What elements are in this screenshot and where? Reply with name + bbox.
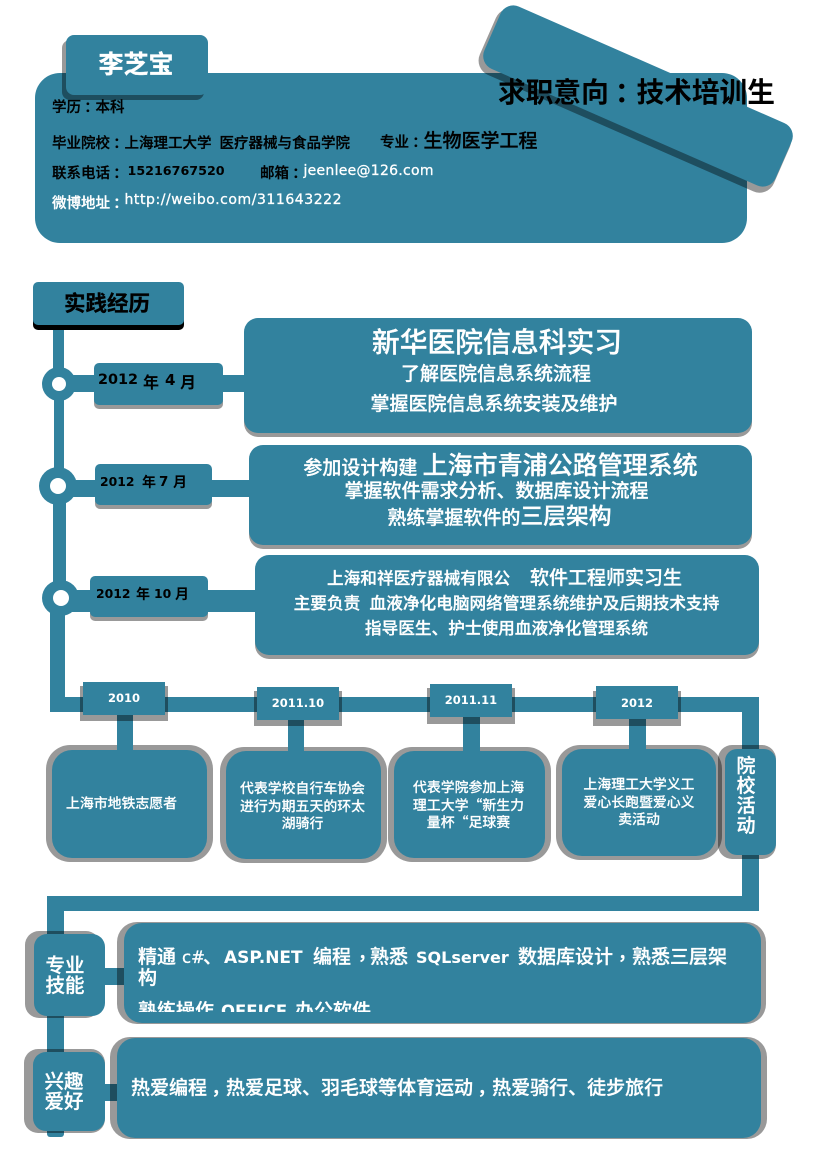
timeline node 3	[42, 580, 79, 616]
skills text: c#	[182, 948, 205, 967]
skills text: ASP.NET	[224, 948, 303, 968]
school: 毕业院校：上海理工大学 医疗器械与食品学院	[52, 132, 350, 153]
date text: 年	[143, 373, 159, 392]
card text: 上海理工大学义工	[583, 776, 695, 792]
label text: 专业	[45, 955, 84, 977]
label text: 动	[736, 816, 756, 837]
skills text: 数据库设计	[518, 947, 613, 968]
weibo: 微博地址：http://weibo.com/311643222	[52, 192, 342, 213]
timeline node 1	[42, 367, 76, 401]
panel: professional skills	[117, 922, 766, 1024]
card text: 进行为期五天的环太	[240, 798, 365, 814]
skills text	[138, 944, 727, 1012]
company title: 软件工程师实习生	[530, 568, 682, 589]
year tag: 2012	[593, 686, 681, 726]
card text	[583, 776, 695, 827]
label text: 活	[736, 796, 756, 817]
label text: 爱好	[44, 1091, 84, 1113]
year text: 2011.10	[272, 696, 324, 710]
panel: hobbies	[110, 1037, 767, 1139]
card text: 代表学院参加上海	[413, 779, 524, 795]
job objective: 求职意向：技术培训生	[498, 70, 775, 110]
skills text: 编程	[313, 947, 351, 968]
name tab	[66, 35, 208, 95]
card text: 量杯“足球赛	[427, 812, 510, 832]
year tag: 2010	[80, 682, 168, 721]
skills text: SQLserver	[416, 948, 509, 967]
project detail 2: 熟练掌握软件的三层架构	[387, 503, 612, 529]
skills text: ，	[353, 944, 372, 971]
timeline node 2	[39, 467, 77, 505]
internship detail 1: 了解医院信息系统流程	[401, 364, 591, 385]
card text: 代表学校自行车协会	[240, 780, 365, 796]
label text	[736, 756, 756, 837]
label text: 校	[736, 776, 756, 797]
year tag: 2011.10	[254, 687, 342, 726]
date text: 10	[154, 586, 171, 601]
company title	[327, 568, 682, 589]
phone: 联系电话：15216767520	[52, 162, 225, 183]
hobbies text: 热爱编程，热爱足球、羽毛球等体育运动，热爱骑行、徒步旅行	[131, 1073, 663, 1100]
card text: 上海市地铁志愿者	[66, 795, 177, 811]
card text	[240, 780, 365, 831]
card text: 卖活动	[618, 811, 660, 827]
date text: 2012	[98, 372, 138, 388]
year text: 2011.11	[445, 693, 497, 707]
panel: medical device company	[255, 555, 759, 655]
date text	[96, 586, 189, 603]
card text: 湖骑行	[282, 815, 323, 831]
education: 学历：本科	[52, 96, 124, 117]
date text: 2012	[96, 586, 130, 601]
label: campus activities	[718, 745, 776, 859]
card text: 爱心长跑暨爱心义	[583, 794, 695, 810]
name: 李芝宝	[98, 51, 174, 79]
skills text: 精通	[138, 947, 176, 968]
label text	[45, 955, 84, 997]
label: hobbies	[24, 1049, 105, 1133]
panel: personal info	[35, 73, 747, 243]
date text: 2012	[100, 474, 134, 489]
skills text: ，	[613, 944, 632, 971]
project title: 参加设计构建 上海市青浦公路管理系统	[303, 452, 698, 480]
year text: 2010	[108, 691, 140, 705]
date: 2012 October	[90, 576, 208, 617]
year text: 2012	[621, 696, 653, 710]
card: metro volunteer	[46, 745, 213, 862]
date: 2012 July	[95, 464, 212, 505]
label: skills	[25, 931, 105, 1018]
date text	[98, 371, 196, 392]
date text: 月	[173, 475, 187, 491]
heading: practice experience	[33, 282, 184, 325]
skills text: 构	[138, 968, 157, 989]
date text: 月	[175, 587, 189, 603]
card text: 理工大学“新生力	[413, 794, 524, 814]
date text: 4	[165, 371, 175, 389]
year tag: 2011.11	[427, 684, 515, 724]
card text	[413, 779, 524, 832]
date text: 年	[142, 475, 156, 491]
project detail 1: 掌握软件需求分析、数据库设计流程	[344, 481, 648, 502]
skills text: 熟悉三层架	[632, 947, 727, 968]
date text: 7	[159, 474, 168, 490]
company title: 上海和祥医疗器械有限公	[327, 569, 510, 588]
company detail 1: 主要负责 血液净化电脑网络管理系统维护及后期技术支持	[294, 594, 719, 613]
internship title: 新华医院信息科实习	[372, 327, 622, 358]
label text: 院	[736, 756, 756, 777]
date: 2012 April	[94, 363, 223, 405]
panel: hospital internship	[244, 318, 752, 433]
label text: 兴趣	[44, 1071, 84, 1093]
date text	[100, 474, 187, 491]
company detail 2: 指导医生、护士使用血液净化管理系统	[365, 619, 648, 638]
card: football	[388, 747, 551, 862]
heading text: 实践经历	[64, 292, 150, 316]
stem lines to cards	[117, 715, 646, 751]
internship detail 2: 掌握医院信息系统安装及维护	[370, 394, 618, 415]
banner: job objective background	[479, 1, 797, 191]
skills text: 、	[203, 947, 222, 968]
date text: 年	[136, 587, 150, 603]
major: 专业：生物医学工程	[380, 131, 538, 152]
skills text: 熟悉	[370, 947, 408, 968]
label text	[44, 1071, 84, 1113]
email: 邮箱：jeenlee@126.com	[260, 162, 434, 183]
card: charity run	[556, 745, 722, 860]
panel: road management system	[249, 445, 752, 545]
card: cycling	[220, 747, 387, 863]
date text: 月	[180, 373, 196, 392]
label text: 技能	[45, 975, 84, 997]
